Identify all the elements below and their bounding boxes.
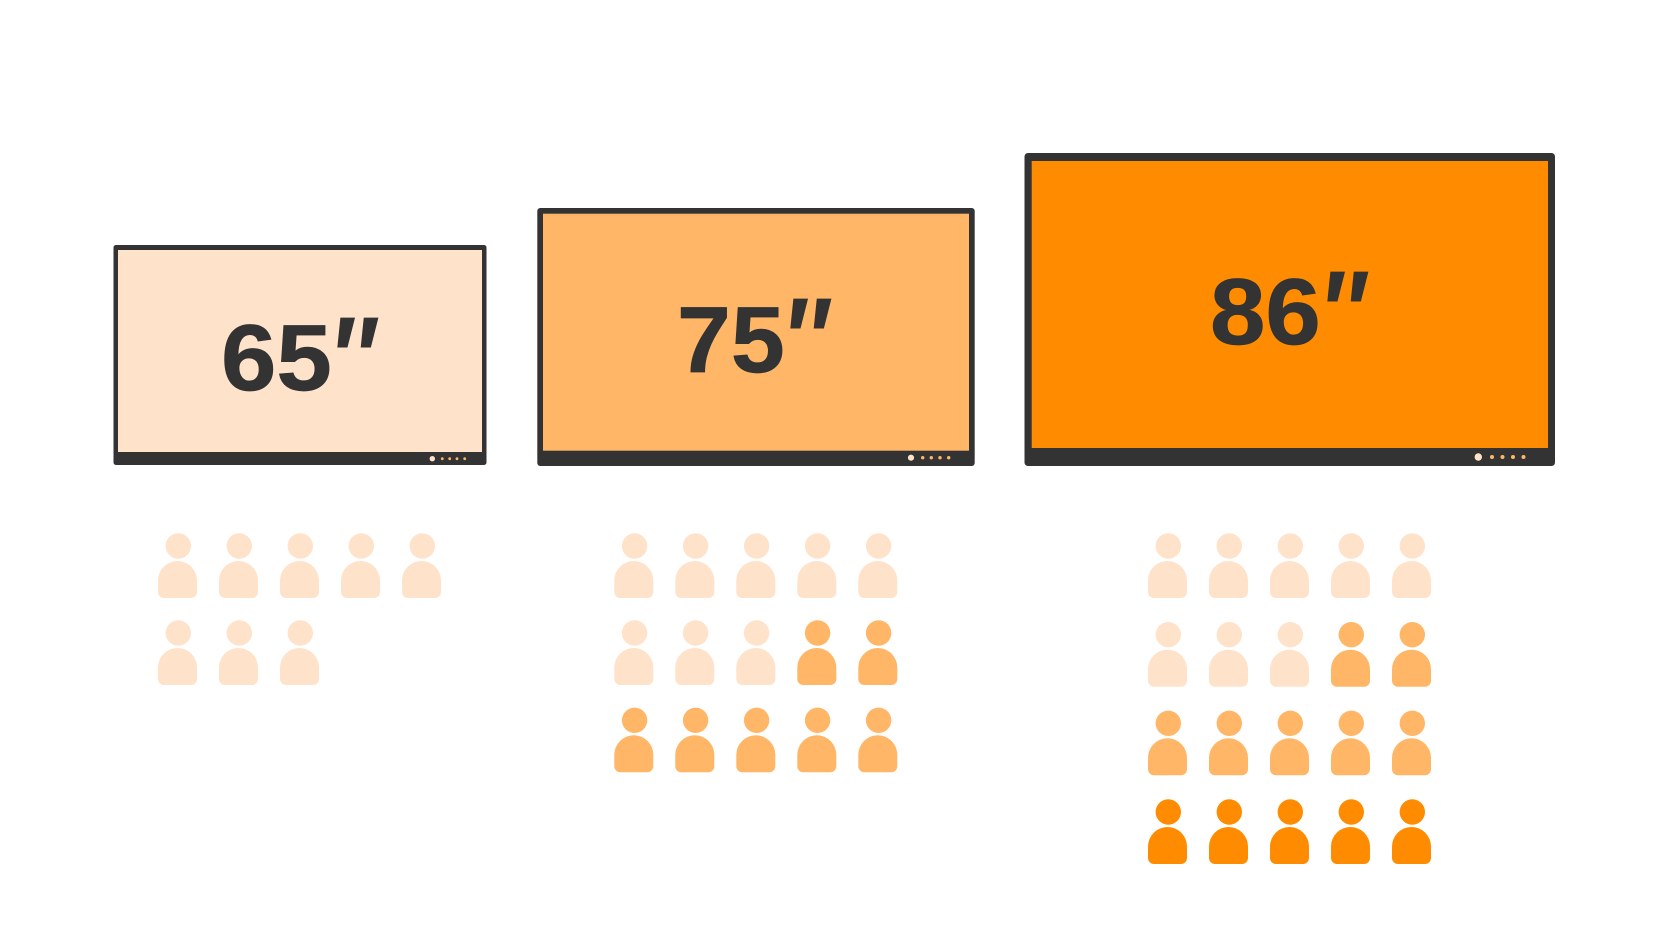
size label 86 [1210,246,1369,378]
size label 65: 65 [221,305,332,410]
size label 65: ″ [328,292,379,424]
display frame [1024,153,1555,466]
display screen [543,214,969,451]
control dots [1475,453,1526,461]
size label 75: 75 [677,288,785,393]
display frame [114,245,486,465]
size label 75: ″ [781,273,832,405]
control dots [908,455,950,461]
display screen [1032,161,1548,448]
display screen [118,250,482,452]
people group: 65 inch, 8 viewers [158,533,441,685]
panel: 75 inch display [537,208,975,466]
control dots [430,456,466,461]
people group: 86 inch, 20 viewers [1148,533,1431,864]
size label 86: 86 [1210,259,1321,364]
panel: 86 inch display [1024,153,1555,466]
display frame [537,208,975,466]
panel: 65 inch display [114,245,486,465]
size label 86: ″ [1318,246,1369,378]
size label 75 [677,273,832,405]
size label 65 [221,292,379,424]
people group: 75 inch, 15 viewers [614,533,897,772]
